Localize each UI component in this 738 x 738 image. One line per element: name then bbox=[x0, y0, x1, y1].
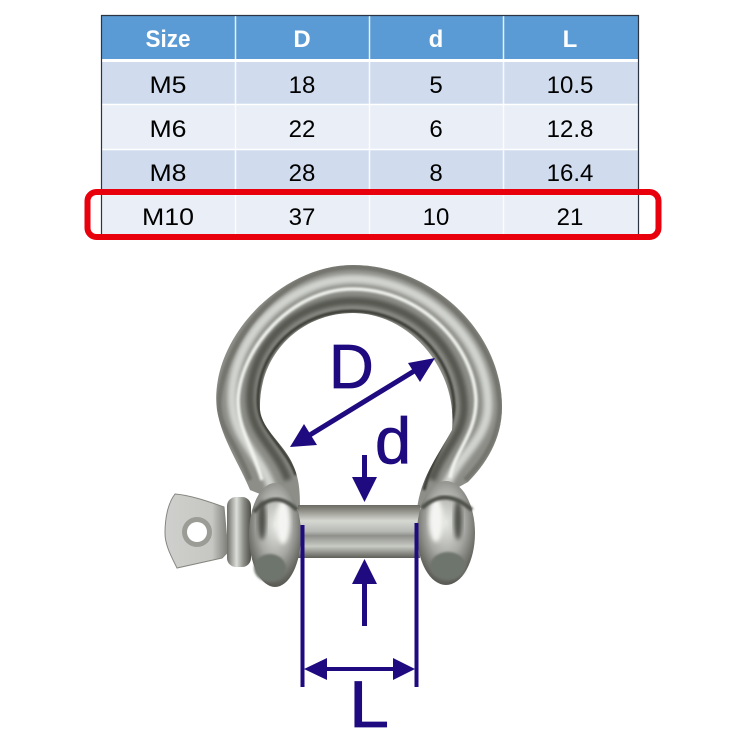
table header row bbox=[102, 16, 638, 59]
L extension lines bbox=[300, 523, 418, 687]
washer bbox=[227, 497, 251, 567]
size table bbox=[102, 16, 638, 236]
d bottom arrow bbox=[352, 559, 377, 626]
table row M5: 5 bbox=[429, 72, 443, 99]
table row M8: 16.4 bbox=[547, 160, 593, 187]
red highlight around M10 row bbox=[88, 192, 658, 237]
shackle photo bbox=[165, 265, 502, 587]
d top arrow bbox=[352, 455, 377, 502]
table row M6 bbox=[102, 105, 638, 149]
table row M8 bbox=[102, 150, 638, 194]
table row M8: 28 bbox=[289, 160, 315, 187]
left ball bbox=[249, 483, 301, 587]
table header row: L bbox=[563, 26, 577, 53]
label d: d bbox=[375, 404, 411, 477]
right ball bbox=[417, 481, 475, 585]
table row M10 bbox=[102, 195, 638, 236]
table row M8: M8 bbox=[150, 160, 186, 187]
D dimension arrow bbox=[290, 358, 435, 447]
table row M10: M10 bbox=[142, 204, 194, 231]
table row M10: 21 bbox=[557, 204, 583, 231]
label D: D bbox=[329, 333, 374, 402]
table row M6: 12.8 bbox=[547, 116, 593, 143]
table row M6: 6 bbox=[429, 116, 443, 143]
shackle bow bbox=[216, 265, 502, 510]
table row M5: 18 bbox=[289, 72, 315, 99]
table row M6: 22 bbox=[289, 116, 315, 143]
table row M5 bbox=[102, 62, 638, 104]
table header row: Size bbox=[146, 26, 190, 53]
infographic bbox=[84, 14, 662, 728]
table row M10: 37 bbox=[289, 204, 315, 231]
table header row: D bbox=[293, 26, 311, 53]
table header row: d bbox=[429, 26, 443, 53]
table row M10: 10 bbox=[423, 204, 449, 231]
table row M8: 8 bbox=[429, 160, 443, 187]
pin bbox=[298, 505, 420, 558]
table row M5: M5 bbox=[150, 72, 186, 99]
L dimension arrow bbox=[304, 658, 415, 680]
table row M6: M6 bbox=[150, 116, 186, 143]
table row M5: 10.5 bbox=[547, 72, 593, 99]
tab with hole bbox=[165, 494, 228, 568]
